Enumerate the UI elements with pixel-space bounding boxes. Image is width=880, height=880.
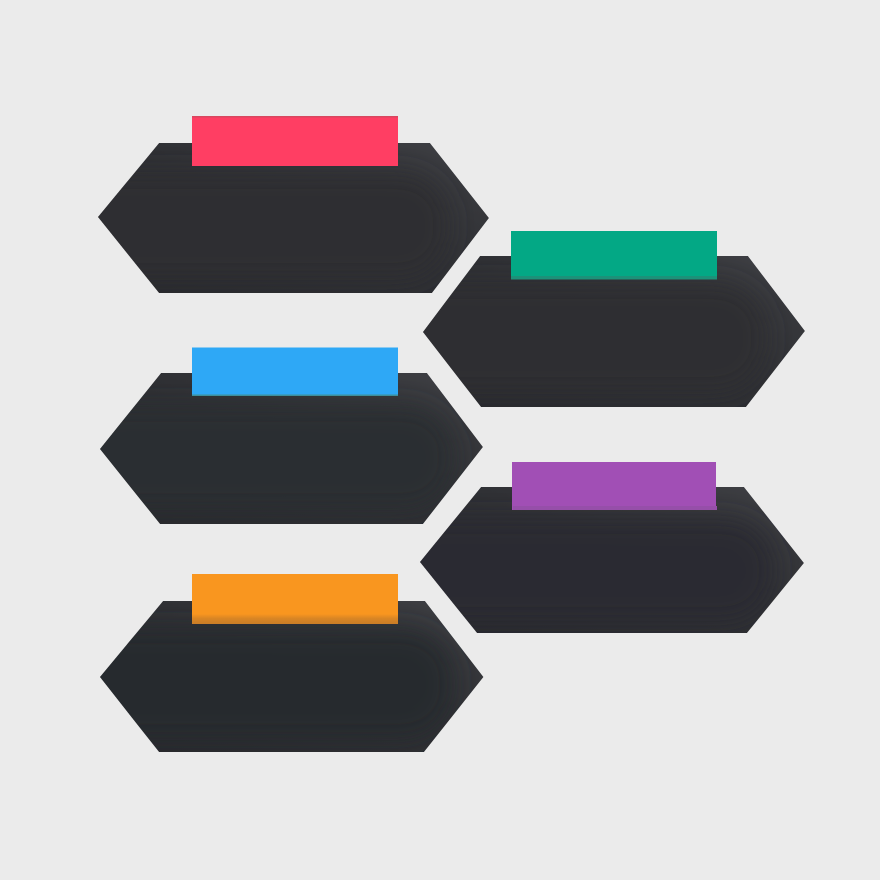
- panel: blue hexagon card: [70, 348, 483, 524]
- panel: red hexagon card: [98, 116, 489, 293]
- tab: orange: [192, 574, 398, 624]
- hexagon: red card body: [98, 143, 489, 293]
- hexagon: orange card body: [60, 601, 484, 752]
- hexagon: purple card body: [385, 487, 804, 633]
- infographic canvas: [98, 116, 805, 752]
- panel: green hexagon card: [423, 231, 805, 407]
- tab: blue: [192, 348, 398, 396]
- tab: red: [192, 116, 398, 166]
- hexagon: blue card body: [70, 373, 483, 524]
- hexagon: green card body: [423, 256, 805, 407]
- tab: green: [511, 231, 717, 280]
- tab: purple: [512, 462, 717, 510]
- panel: orange hexagon card: [60, 574, 484, 752]
- panel: purple hexagon card: [385, 462, 804, 633]
